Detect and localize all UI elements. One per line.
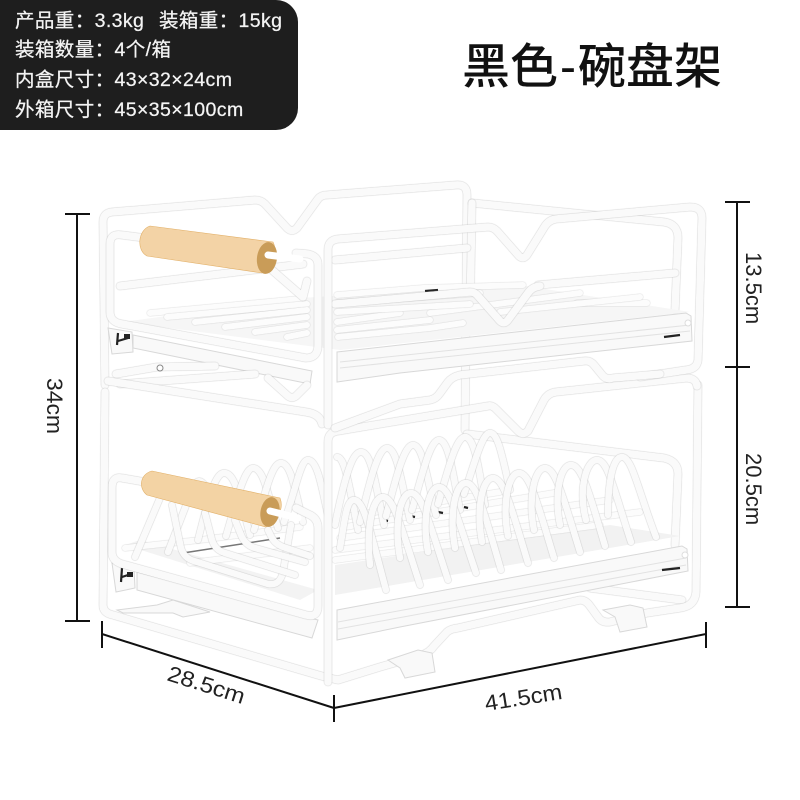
top drawer left rail (108, 328, 312, 384)
top drawer grid (122, 285, 690, 350)
back row plate tines (135, 433, 510, 557)
left hook tines (172, 505, 310, 584)
dimension: height 34cm: 34cm (42, 378, 67, 434)
lower rods (125, 492, 640, 563)
dimension: depth 28.5cm (102, 621, 334, 722)
dimension: lower height 20.5cm: 20.5cm (741, 453, 766, 525)
title: 黑色-碗盘架 (462, 41, 722, 94)
back frame wires (103, 185, 682, 600)
lower wood handle (141, 471, 298, 528)
top wood handle (140, 226, 300, 275)
dimension: width 41.5cm (334, 622, 706, 716)
front row plate tines (340, 457, 656, 590)
upper frame front wires (328, 207, 702, 428)
top drawer right rail (337, 313, 692, 382)
dimension: upper height 13.5cm (725, 202, 766, 607)
lower drawer under tray (117, 600, 210, 617)
lower frame front wires (103, 378, 698, 682)
text: box quantity: 装箱数量：4个/箱 (15, 39, 171, 61)
feet (388, 605, 647, 678)
top drawer under tray (116, 365, 255, 384)
lower drawer right rail (337, 546, 688, 640)
rack: two-tier dish rack (103, 185, 702, 682)
lower drawer left rail (112, 563, 318, 638)
dark shadow marks (183, 507, 468, 553)
top handle wire frame (110, 235, 318, 358)
lower tray (125, 525, 680, 600)
top handle support (272, 270, 307, 297)
dimension: depth 28.5cm: 28.5cm (164, 661, 248, 709)
text: outer carton size: 外箱尺寸：45×35×100cm (15, 99, 244, 121)
text: inner box size: 内盒尺寸：43×32×24cm (15, 69, 232, 91)
dimension: height 34cm (42, 214, 90, 621)
dimension: upper height 13.5cm: 13.5cm (741, 252, 766, 324)
lower handle wire frame (112, 478, 318, 616)
top drawer front wire with notch (335, 286, 540, 323)
dimension: width 41.5cm: 41.5cm (483, 679, 564, 716)
info panel (0, 0, 298, 130)
text: weights: 产品重：3.3kg 装箱重：15kg (15, 10, 282, 32)
top drawer under notch (268, 378, 307, 398)
